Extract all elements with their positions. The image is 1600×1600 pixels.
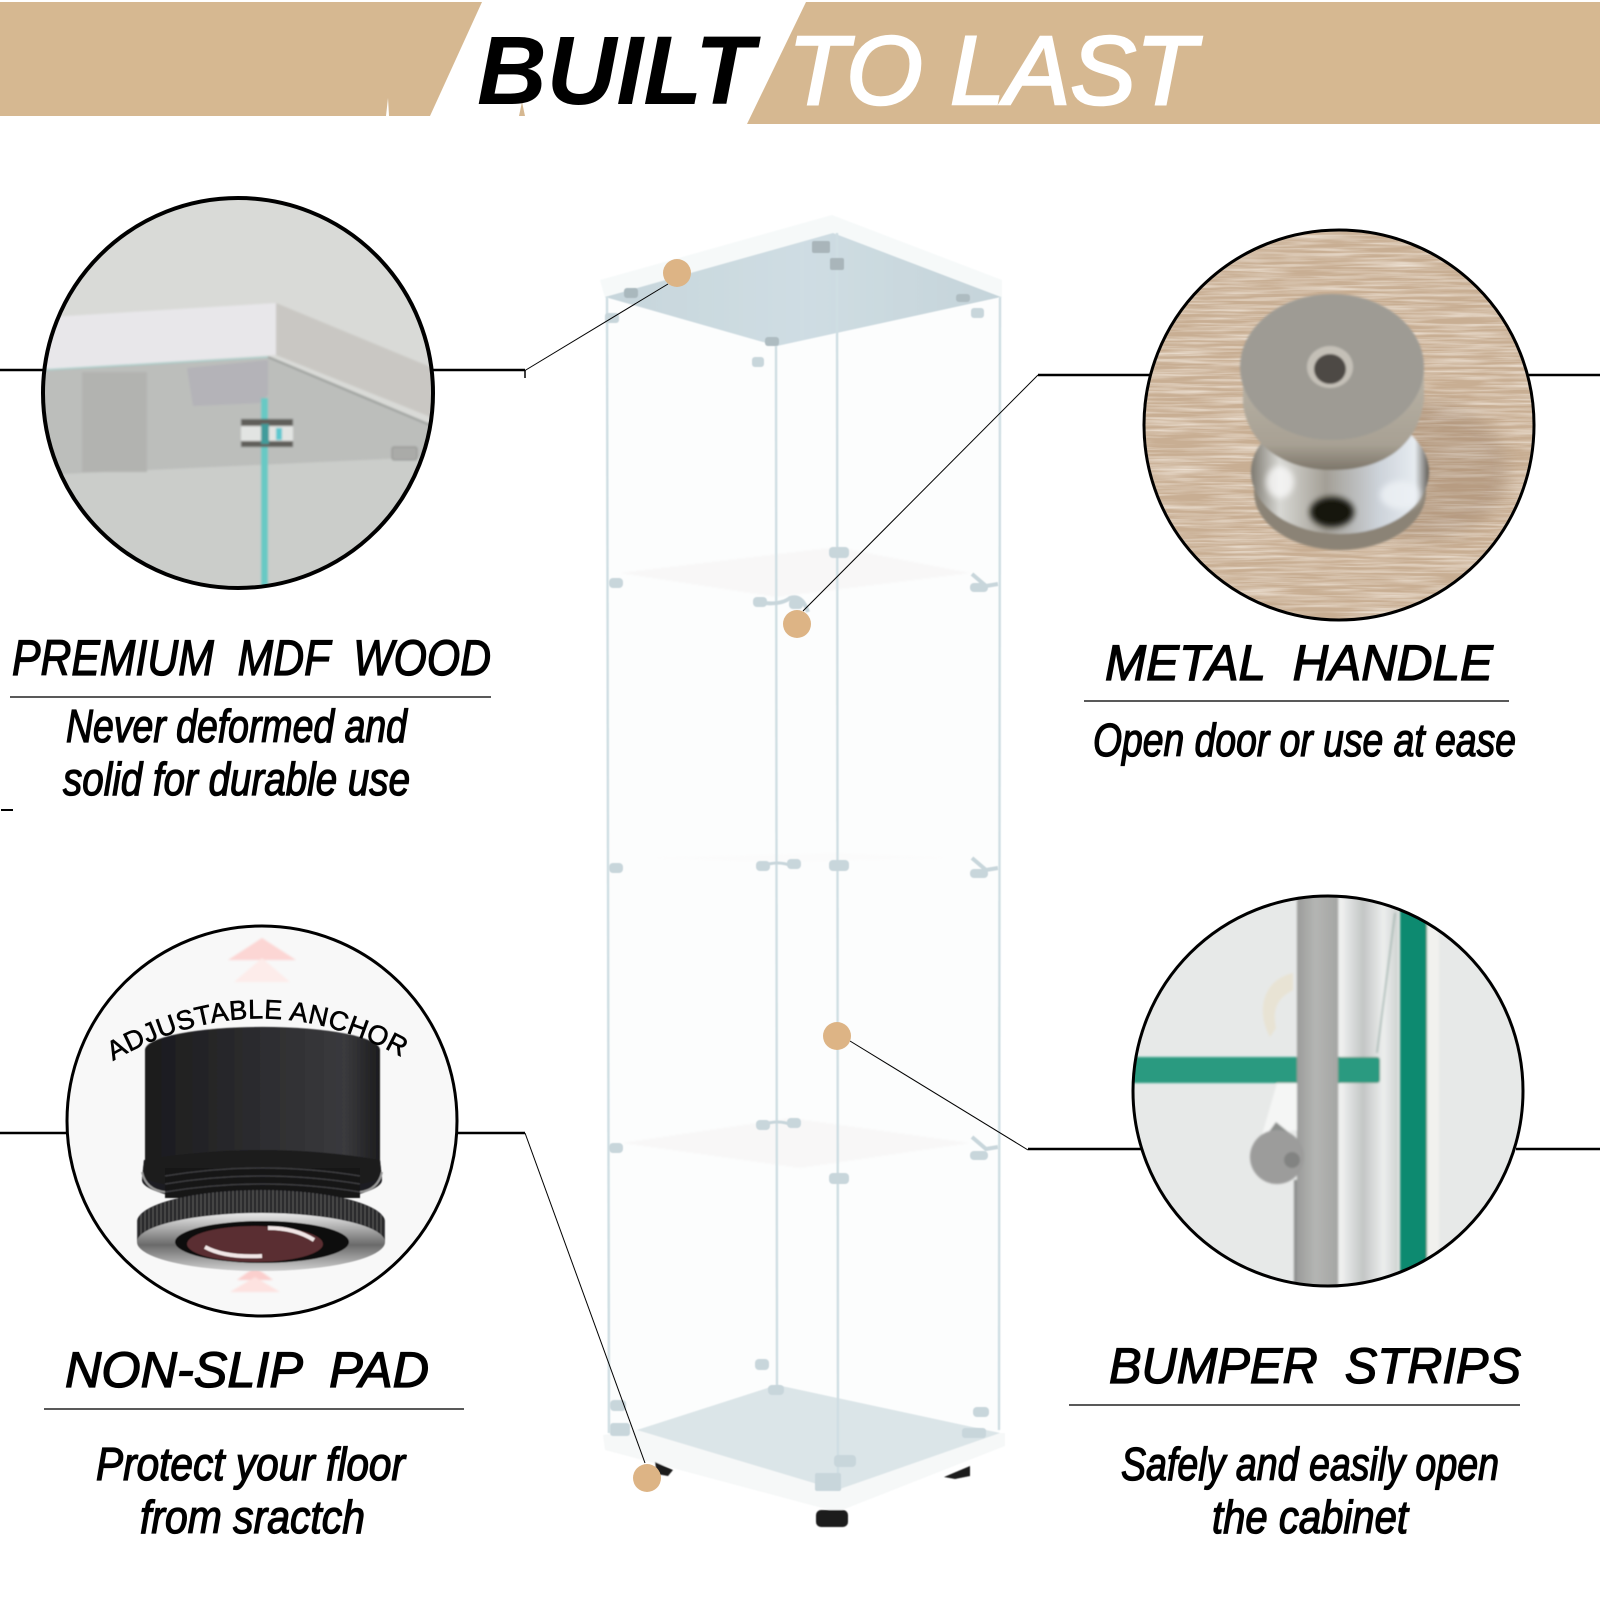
text block: bumper strips [1069,1338,1521,1543]
panel: metal handle detail circle [1140,225,1540,625]
description: premium mdf wood: Never deformed and [66,700,408,752]
description: bumper strips: the cabinet [1212,1491,1410,1543]
text block: metal handle [1084,635,1516,766]
text block: premium mdf wood [1,630,491,811]
callout line: metal handle [803,375,1600,611]
callout line: bumper strips [850,1041,1600,1150]
panel: bumper strip detail circle [1125,890,1535,1300]
hotspot dot: top slab [663,259,691,287]
panel: adjustable anchor foot detail circle: ADJUSTABLE ANCHOR [110,1000,407,1062]
title: to last: TO LAST [788,16,1202,125]
cabinet base [603,1385,1005,1527]
description: premium mdf wood: solid for durable use [63,753,410,805]
heading: non-slip pad: NON-SLIP PAD [65,1342,429,1398]
description: bumper strips: Safely and easily open [1121,1438,1499,1490]
description: non-slip pad: from sractch [140,1491,365,1543]
glass edges [607,233,1000,1490]
heading: premium mdf wood: PREMIUM MDF WOOD [12,630,491,686]
title: built: BUILT [477,16,762,125]
banner: right tan band [747,2,1600,124]
glass cabinet product illustration [600,215,1005,1527]
banner: left tan band [0,2,482,116]
hotspot dot: foot [633,1464,661,1492]
description: non-slip pad: Protect your floor [96,1438,406,1490]
pink adjustment arrows [228,938,296,1292]
cabinet interior glass [607,297,1000,1490]
curved label: adjustable anchor [113,1018,412,1063]
description: metal handle: Open door or use at ease [1093,714,1516,766]
callout line: premium mdf wood [0,284,668,378]
threads [141,1160,383,1195]
black anchor cylinder [145,1027,380,1165]
header banner [0,2,1600,125]
description: non-slip pad [96,1438,406,1543]
hotspot dot: handle [783,610,811,638]
panel: adjustable anchor foot detail circle [66,924,458,1318]
panel: mdf corner detail circle [40,195,440,595]
callout line: non-slip pad [0,1133,645,1463]
hotspot dot: door bumper [823,1022,851,1050]
heading: bumper strips: BUMPER STRIPS [1109,1338,1521,1394]
cabinet shelves [620,547,970,1168]
bumper bolt [1269,1122,1289,1134]
description: premium mdf wood [63,700,410,805]
heading: metal handle: METAL HANDLE [1105,635,1494,691]
description: bumper strips [1121,1438,1499,1543]
cabinet feet [655,1462,970,1527]
knurled ring [136,1190,386,1223]
shelf clips and hinges [605,241,998,1491]
cabinet top slab [600,215,1002,346]
text block: non-slip pad [44,1342,464,1543]
